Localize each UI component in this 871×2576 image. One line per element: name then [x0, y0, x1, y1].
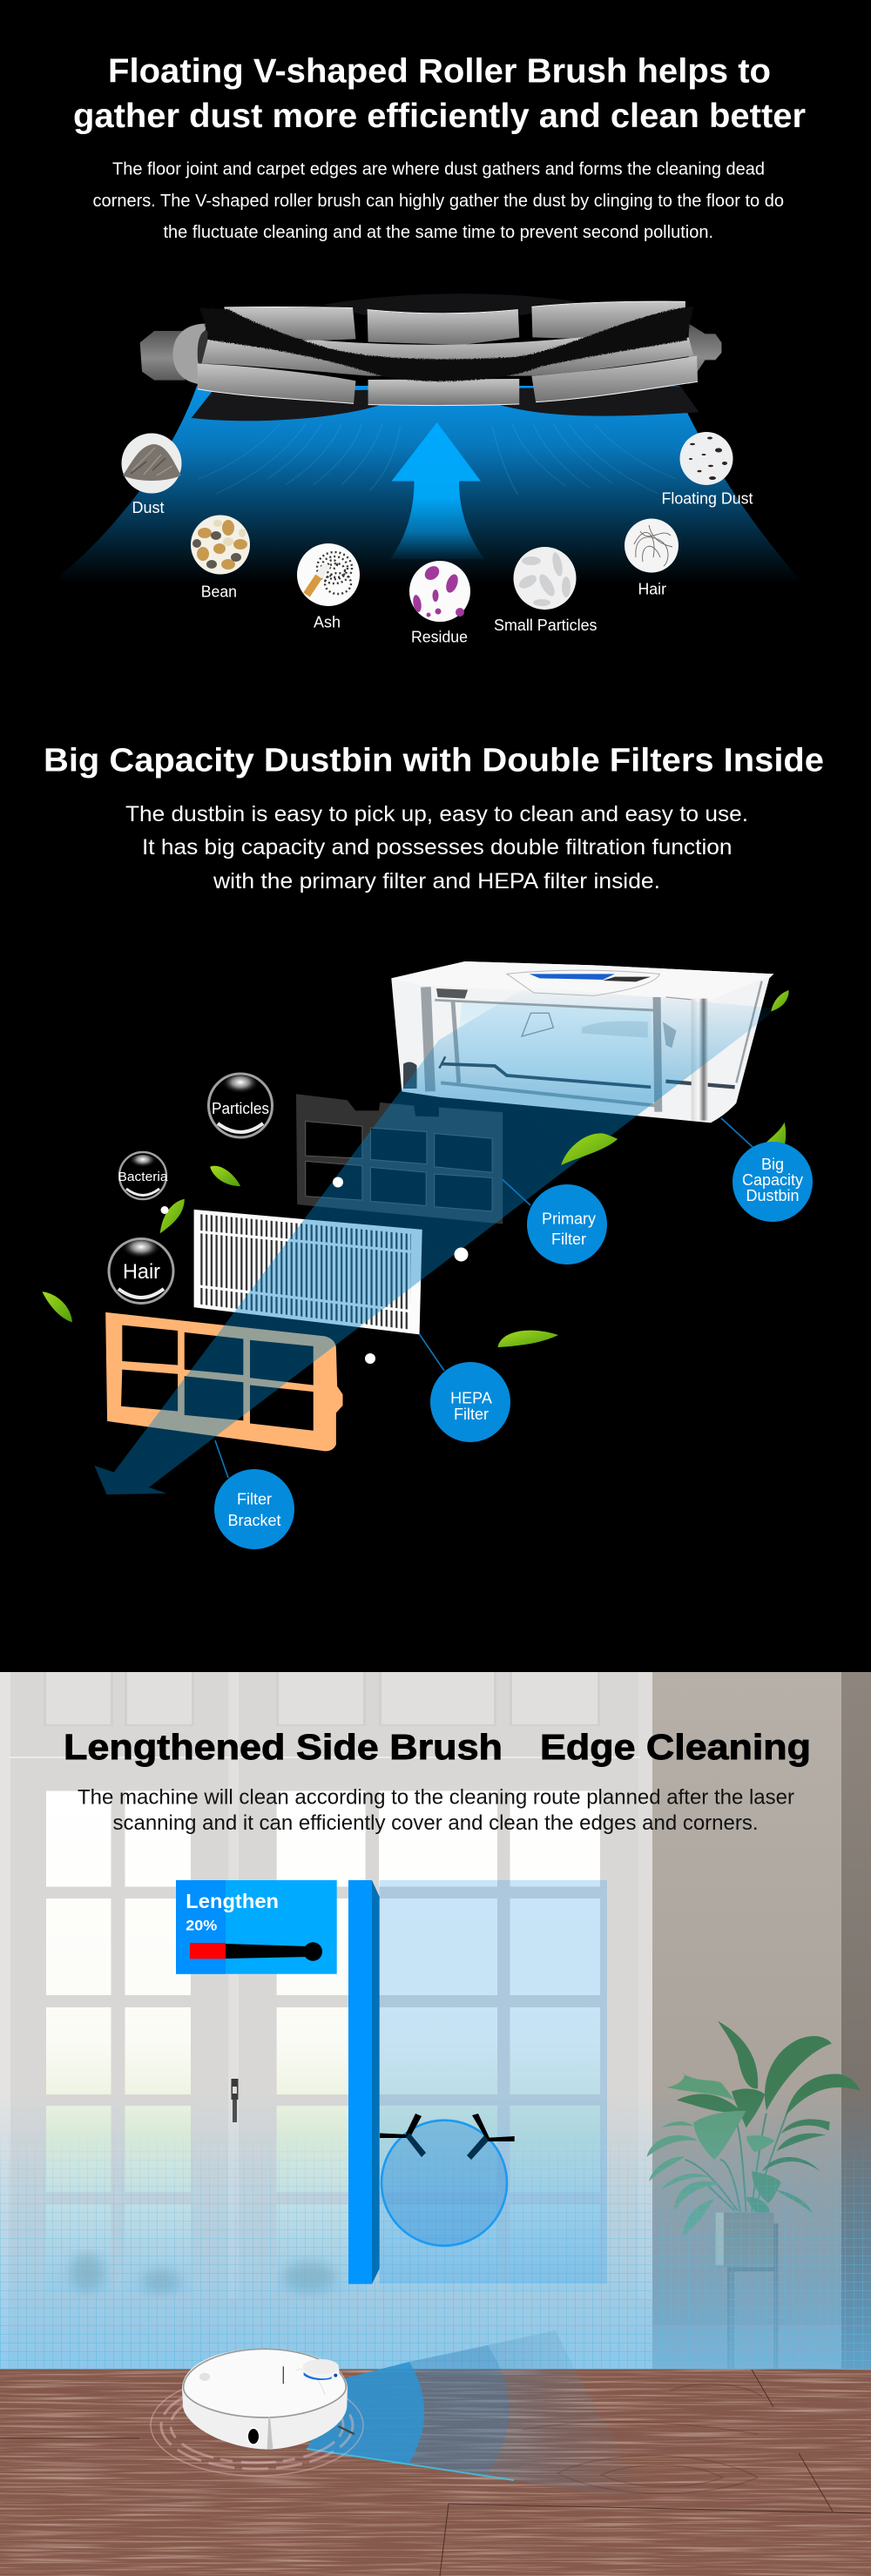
section 3 description: The machine will clean according to the cleaning route planned after the laser: [78, 1785, 794, 1810]
bottom bristles: [192, 386, 699, 421]
houseplant: [647, 2021, 860, 2369]
lidar turret: [302, 2359, 339, 2380]
green leaves: [42, 990, 789, 1347]
window panes: [46, 1790, 600, 2292]
blue suction fan: [54, 386, 801, 581]
section 1 title: [73, 52, 806, 135]
label: Bean: Bean: [201, 583, 237, 601]
upper blade segments: [224, 307, 355, 341]
debris circle: hair: [625, 519, 679, 573]
leaf behind circle: [764, 1123, 786, 1153]
callout: Primary Filter: [527, 1184, 607, 1264]
lengthen callout: [176, 1880, 337, 1974]
callout: Filter Bracket: Filter: [237, 1491, 272, 1508]
right end cap: [689, 324, 721, 385]
big up arrow: [390, 422, 484, 559]
primary filter: [296, 1094, 503, 1224]
callout: Primary Filter: Primary: [542, 1210, 596, 1228]
callout: HEPA Filter: HEPA: [450, 1390, 492, 1407]
side brush left: [380, 2114, 426, 2157]
section 3 title: Lengthened Side Brush: [64, 1727, 503, 1767]
label: Small Particles: Small Particles: [494, 617, 598, 634]
section 2 description: [125, 802, 748, 894]
dust specks: [160, 1177, 469, 1364]
bubble: Hair: [109, 1238, 173, 1303]
front camera: [246, 2427, 260, 2445]
blue wash over room: [0, 2090, 871, 2370]
lengthen callout: Lengthen: [186, 1890, 279, 1912]
bubble: Particles: Particles: [212, 1100, 269, 1117]
callout: Big Capacity Dustbin: [733, 1142, 813, 1222]
HEPA filter: [194, 1210, 422, 1334]
section 1 description: The floor joint and carpet edges are where dust gathers and forms the cleaning dead: [112, 160, 765, 179]
debris circle: floating dust: [679, 432, 733, 485]
pink sensor rings: [151, 2375, 363, 2476]
lower blade segments: [198, 363, 355, 403]
left end cap: [140, 331, 186, 381]
callout: HEPA Filter: [430, 1362, 510, 1442]
brush length icon: [190, 1942, 322, 1961]
debris circle: residue: [409, 561, 470, 622]
robot footprint circle: [381, 2121, 507, 2246]
bubble: Bacteria: [118, 1152, 168, 1199]
debris circle: ash: [297, 543, 360, 606]
scanning sector: [307, 2330, 650, 2501]
section 1 title: gather dust more efficiently and clean better: [73, 98, 806, 135]
label: Ash: Ash: [314, 614, 341, 631]
section 2 description: with the primary filter and HEPA filter inside.: [213, 869, 660, 894]
section 2 title: Big Capacity Dustbin with Double Filters Inside: [44, 743, 824, 779]
callout: Big Capacity Dustbin: Capacity: [742, 1171, 803, 1189]
debris circle: small particles: [514, 547, 577, 610]
roller brush: [140, 293, 721, 421]
section 1 title: Floating V-shaped Roller Brush helps to: [108, 52, 771, 91]
exploded dustbin diagram: [94, 961, 786, 1494]
callout: Filter Bracket: Bracket: [227, 1512, 281, 1529]
side brush: [338, 2426, 354, 2434]
lengthen callout: 20%: [186, 1918, 217, 1934]
rear bristles: [323, 293, 577, 315]
section 3 title: [64, 1727, 811, 1767]
debris circle: dust: [122, 434, 181, 493]
label: Floating Dust: Floating Dust: [662, 490, 753, 508]
bubble: Bacteria: Bacteria: [118, 1170, 168, 1184]
airflow lines: [199, 424, 676, 495]
label: Hair: Hair: [638, 581, 666, 598]
callout: Primary Filter: Filter: [551, 1231, 586, 1248]
callout: Filter Bracket: [214, 1469, 294, 1549]
door handle: [232, 2079, 239, 2122]
section 1 description: [92, 160, 784, 242]
callout: Big Capacity Dustbin: Dustbin: [746, 1187, 800, 1204]
wooden floor: [0, 2369, 871, 2576]
bubble: Hair: Hair: [123, 1260, 160, 1284]
callout: Big Capacity Dustbin: Big: [761, 1156, 784, 1173]
section 3 room background: [0, 1672, 871, 2370]
callout: HEPA Filter: Filter: [454, 1406, 489, 1423]
section 1 description: the fluctuate cleaning and at the same time to prevent second pollution.: [164, 223, 713, 242]
grid overlay: [0, 2125, 871, 2370]
translucent room area: [380, 1880, 607, 2283]
filter bracket: [105, 1312, 343, 1451]
side brush right: [467, 2114, 515, 2160]
label: Dust: Dust: [132, 499, 164, 516]
section 3 title: Edge Cleaning: [540, 1727, 811, 1767]
bubble: Particles: [209, 1074, 272, 1137]
plant pot: [716, 2213, 778, 2369]
section 1 description: corners. The V-shaped roller brush can highly gather the dust by clinging to the floor to do: [92, 192, 784, 211]
V-shaped bristle strip: [199, 307, 693, 381]
section 3 description: scanning and it can efficiently cover and clean the edges and corners.: [113, 1811, 758, 1835]
leader lines: [215, 1118, 753, 1478]
blurred garden shapes: [70, 2254, 335, 2294]
debris circle: bean: [191, 516, 250, 575]
airflow beam arrow: [94, 987, 778, 1494]
section 3 description: [78, 1785, 794, 1835]
dustbin: [391, 961, 773, 1123]
section 2 description: It has big capacity and possesses double filtration function: [142, 835, 732, 860]
robot vacuum: [182, 2349, 354, 2450]
wall bar: [348, 1880, 380, 2284]
label: Residue: Residue: [411, 629, 468, 646]
section 2 description: The dustbin is easy to pick up, easy to clean and easy to use.: [125, 802, 748, 826]
central band: [201, 337, 693, 376]
